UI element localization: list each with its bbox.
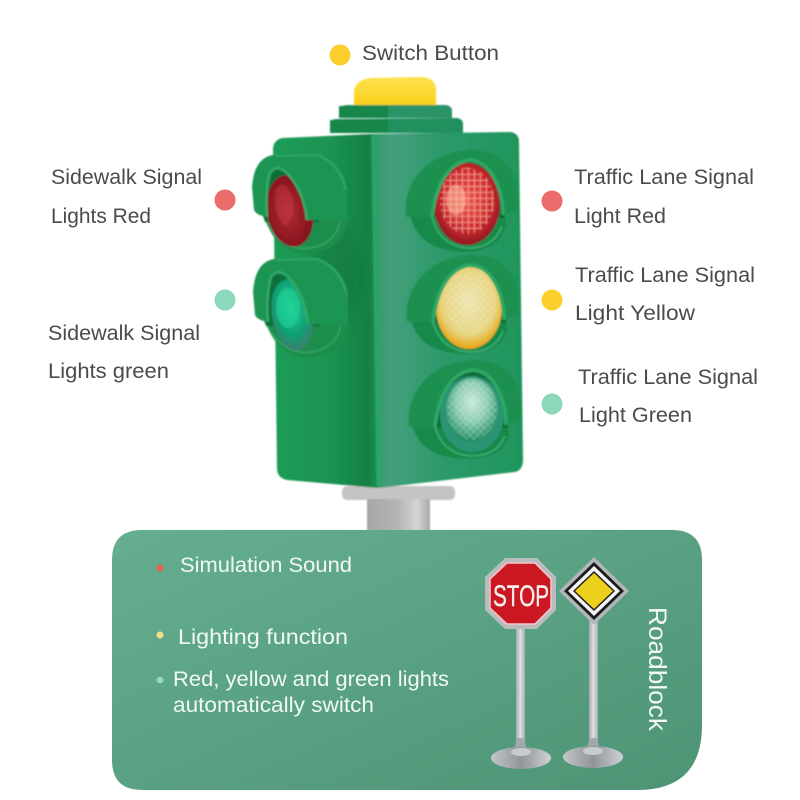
right yellow signal: [407, 255, 520, 354]
label: traffic lane signal light green: [542, 366, 758, 427]
label: traffic lane signal light yellow: [542, 264, 755, 325]
label: sidewalk signal lights green: [48, 290, 236, 383]
right red signal: [406, 150, 519, 252]
vertical label: roadblock: Roadblock: [643, 607, 671, 732]
label: traffic lane signal light red: [542, 166, 754, 228]
label: sidewalk signal lights red: [51, 166, 236, 228]
feature: lighting function: Lighting function: [178, 626, 348, 649]
label: sidewalk signal lights red: Sidewalk Signal: [51, 166, 202, 189]
feature: automatic light switching: [156, 668, 449, 717]
label: traffic lane signal light yellow: Light Yellow: [575, 302, 696, 325]
button base tiers: [330, 105, 463, 133]
label: traffic lane signal light yellow: Traffic Lane Signal: [575, 264, 755, 287]
label: traffic lane signal light green: Light Green: [579, 404, 692, 427]
label: traffic lane signal light green: Traffic Lane Signal: [578, 366, 758, 389]
panel: features and roadblock: [112, 530, 702, 790]
corner highlight: [373, 136, 378, 486]
feature: automatic light switching: Red, yellow and green lights: [173, 668, 449, 691]
housing left face: [273, 134, 378, 488]
left red signal: [252, 154, 348, 253]
shadows under left hoods: [311, 220, 359, 330]
switch button: [354, 77, 436, 105]
stop sign: [485, 558, 556, 769]
priority road diamond sign: [559, 557, 629, 768]
title label: switch button: Switch Button: [362, 42, 499, 65]
label: sidewalk signal lights green: Lights green: [48, 360, 169, 383]
photo: traffic light toy: [252, 77, 523, 532]
right green signal: [409, 360, 522, 459]
feature: automatic light switching: automatically switch: [173, 694, 374, 717]
label: traffic lane signal light red: Light Red: [574, 205, 666, 228]
label: sidewalk signal lights green: Sidewalk Signal: [48, 322, 200, 345]
feature: simulation sound: Simulation Sound: [180, 554, 352, 577]
pole stem: [342, 486, 455, 532]
label: traffic lane signal light red: Traffic Lane Signal: [574, 166, 754, 189]
housing right face: [372, 132, 523, 488]
panel background: [112, 530, 702, 790]
stop sign: STOP: [493, 580, 549, 613]
left green signal: [253, 258, 349, 357]
label: sidewalk signal lights red: Lights Red: [51, 205, 151, 228]
